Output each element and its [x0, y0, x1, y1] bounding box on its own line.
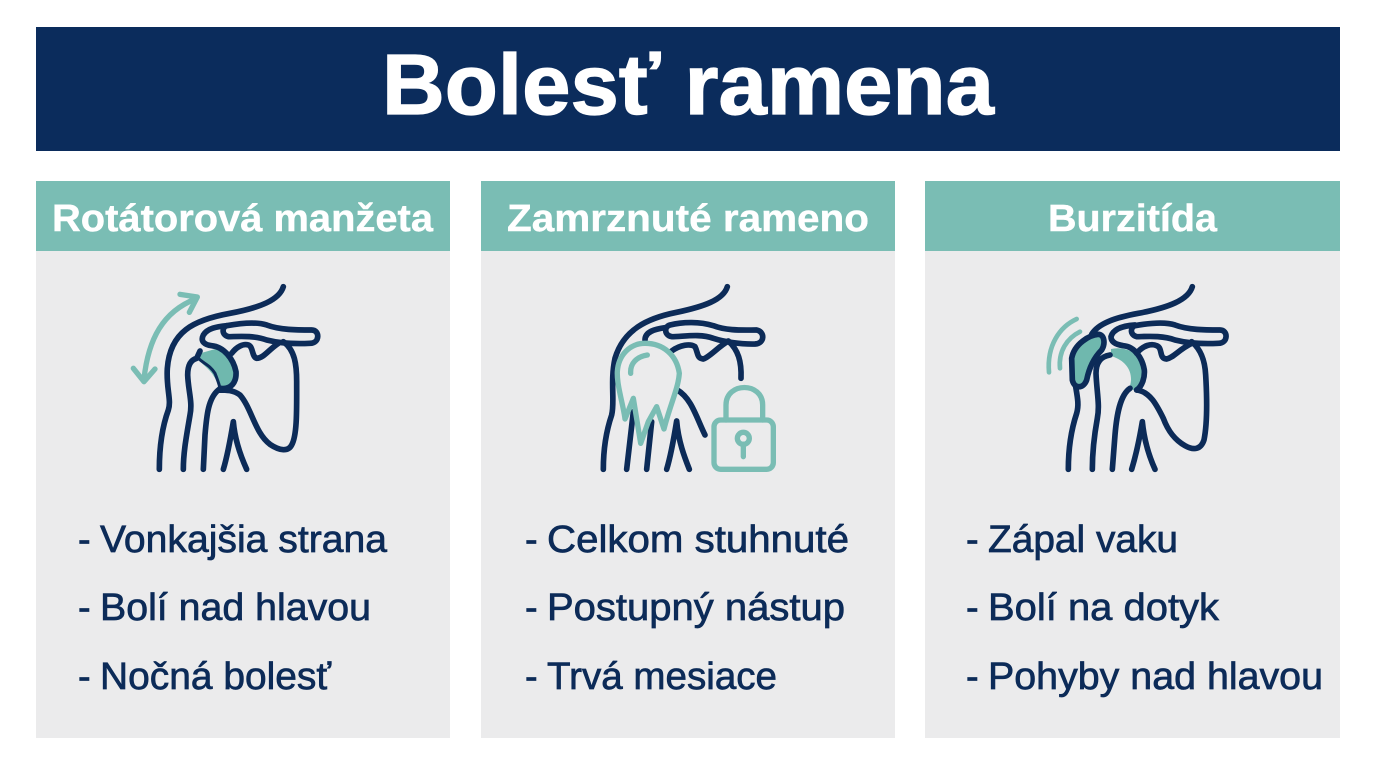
list: Burzitída symptoms: - — [966, 587, 979, 629]
list: Rotátorová manžeta symptoms: - — [78, 519, 91, 561]
list: Zamrznuté rameno symptoms: - — [525, 587, 538, 629]
title banner — [36, 27, 1340, 151]
panel heading: Burzitída — [925, 181, 1340, 251]
panel heading: Zamrznuté rameno — [481, 181, 895, 251]
list: Rotátorová manžeta symptoms: - — [78, 587, 91, 629]
title: Bolesť ramena — [382, 38, 995, 133]
panel: Rotátorová manžeta — [36, 181, 450, 738]
panel: Zamrznuté rameno — [481, 181, 895, 738]
list: Zamrznuté rameno symptoms — [525, 519, 849, 698]
panel heading: Zamrznuté rameno: Zamrznuté rameno — [507, 198, 869, 240]
icon: shoulder with rotator cuff and motion arrow — [133, 287, 318, 469]
icon: shoulder with inflamed bursa — [1049, 287, 1226, 469]
list: Zamrznuté rameno symptoms: Postupný nástup — [547, 587, 845, 629]
list: Rotátorová manžeta symptoms: Bolí nad hlavou — [100, 587, 371, 629]
list: Zamrznuté rameno symptoms: - — [525, 656, 538, 698]
panel heading: Rotátorová manžeta: Rotátorová manžeta — [52, 198, 434, 240]
panel heading: Burzitída: Burzitída — [1048, 198, 1218, 240]
list: Burzitída symptoms: - — [966, 519, 979, 561]
list: Rotátorová manžeta symptoms: Vonkajšia strana — [100, 519, 388, 561]
panel heading: Rotátorová manžeta — [36, 181, 450, 251]
panel: Burzitída — [925, 181, 1340, 738]
list: Burzitída symptoms: Zápal vaku — [988, 519, 1178, 561]
list: Burzitída symptoms: Bolí na dotyk — [988, 587, 1220, 629]
list: Zamrznuté rameno symptoms: - — [525, 519, 538, 561]
list: Rotátorová manžeta symptoms: - — [78, 656, 91, 698]
list: Burzitída symptoms: Pohyby nad hlavou — [988, 656, 1323, 698]
list: Rotátorová manžeta symptoms — [78, 519, 388, 698]
list: Rotátorová manžeta symptoms: Nočná bolesť — [100, 656, 332, 698]
list: Zamrznuté rameno symptoms: Trvá mesiace — [547, 656, 777, 698]
list: Zamrznuté rameno symptoms: Celkom stuhnuté — [547, 519, 849, 561]
list: Burzitída symptoms — [966, 519, 1323, 698]
list: Burzitída symptoms: - — [966, 656, 979, 698]
icon: frozen shoulder with ice and padlock — [603, 287, 773, 469]
